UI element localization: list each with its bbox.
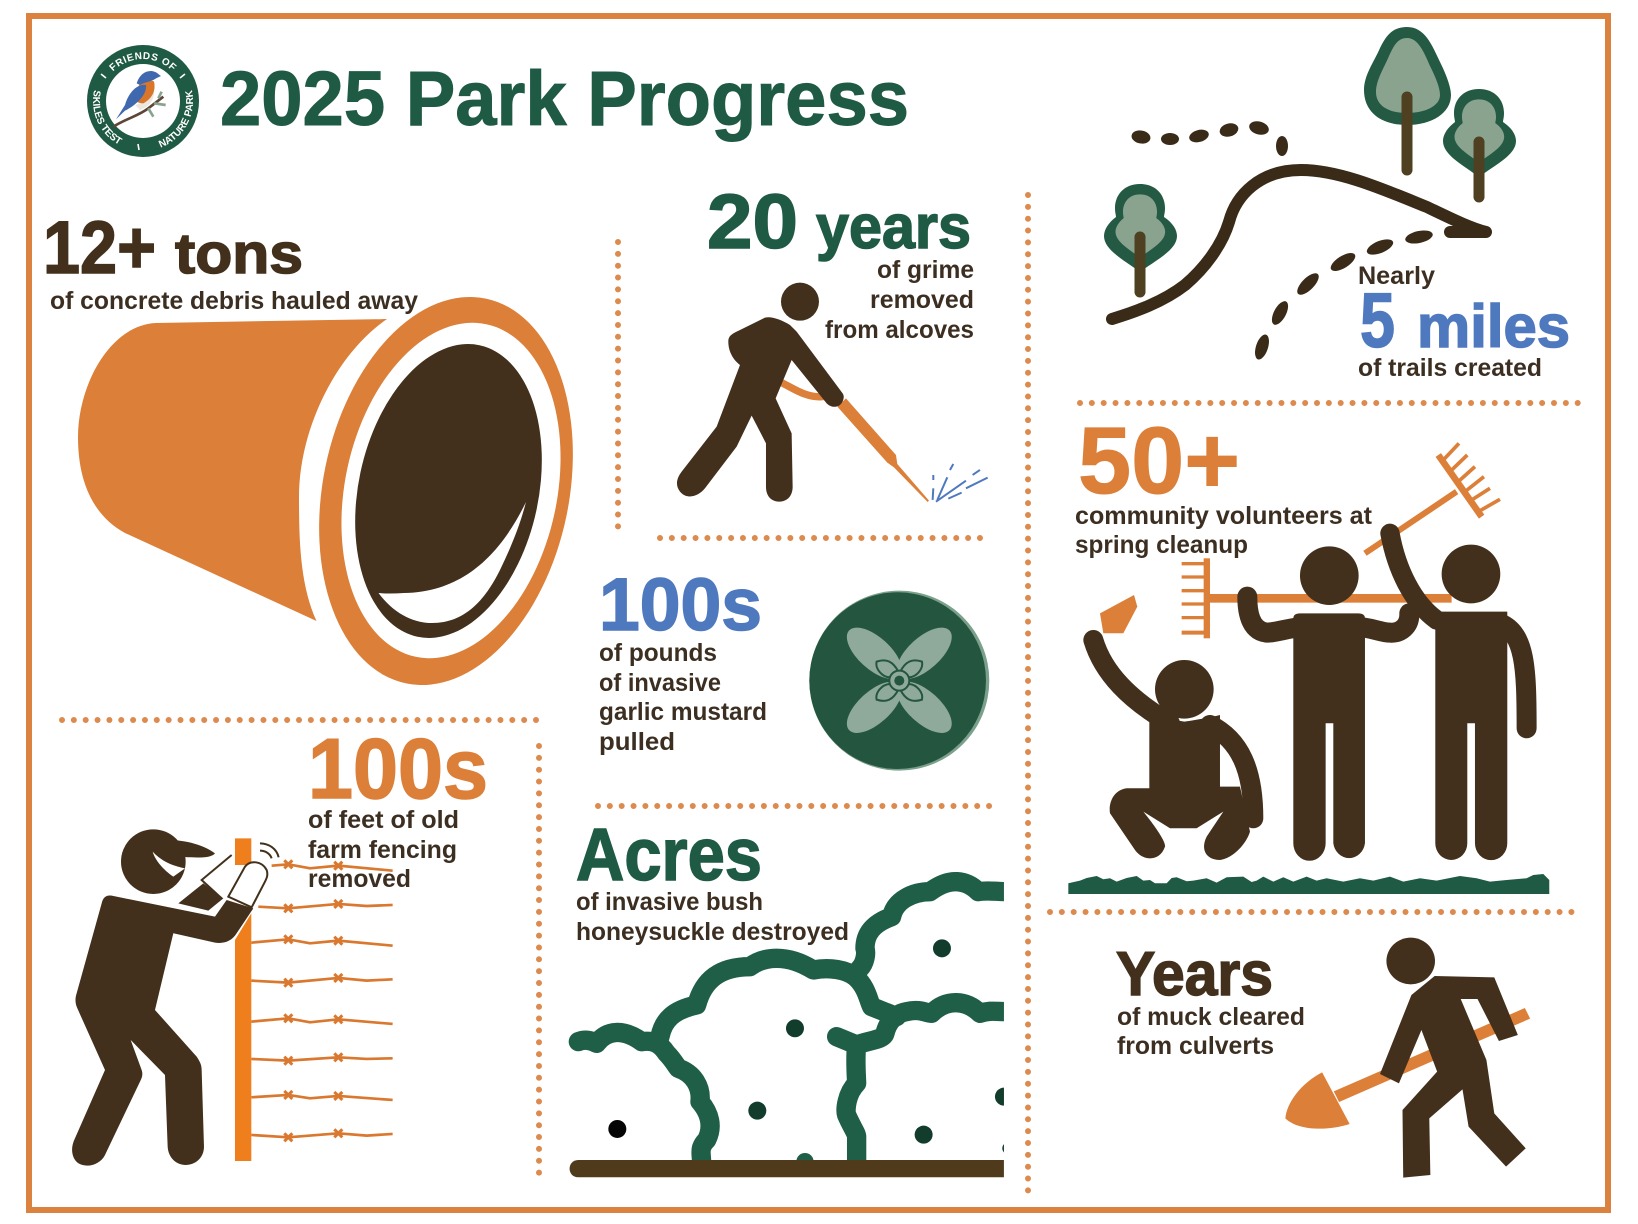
caption: garlic mustard: garlic mustard [599, 698, 767, 726]
title: 2025 Park Progress [220, 56, 909, 142]
stat: 20 years: 20 [707, 179, 798, 265]
caption: volunteers: spring cleanup [1075, 531, 1248, 559]
panel: bush honeysuckle [570, 813, 1014, 1177]
panel: concrete debris [43, 206, 606, 708]
stat: 20 years: years [816, 193, 971, 262]
logo: Friends of Skiles Test Nature Park: FRIENDS OF [108, 52, 177, 71]
icon: person with shovel [1285, 938, 1527, 1178]
caption: garlic mustard [599, 639, 767, 756]
stat: 12+ tons [43, 206, 303, 289]
caption: garlic mustard: of pounds [599, 639, 717, 667]
caption: farm fencing: removed [308, 865, 411, 893]
caption: farm fencing: of feet of old [308, 806, 459, 834]
panel: farm fencing [72, 722, 488, 1166]
caption: grime: removed [870, 286, 974, 314]
icon: tree large [1364, 27, 1451, 170]
panel: grime removed [677, 179, 988, 502]
stat: 100s pounds: 100s [599, 563, 762, 646]
stat: 50+: 50+ [1078, 408, 1240, 514]
stat: 20 years [707, 179, 971, 265]
caption: muck [1117, 1003, 1305, 1060]
icon: fence post and barbed wire [235, 838, 393, 1161]
icon: person cutting fence [72, 829, 279, 1166]
icon: tree right [1443, 89, 1516, 197]
caption: volunteers: community volunteers at [1075, 502, 1373, 530]
stat: Years: Years [1116, 940, 1273, 1009]
logo: Friends of Skiles Test Nature Park: NATURE PARK [158, 90, 193, 148]
caption: trails created: of trails created [1358, 354, 1542, 382]
caption: garlic mustard: pulled [599, 728, 675, 756]
caption: grime [825, 256, 974, 344]
panel: volunteers [1068, 408, 1549, 894]
caption: volunteers [1075, 502, 1373, 559]
caption: muck: of muck cleared [1117, 1003, 1305, 1031]
caption: grime: of grime [877, 256, 974, 284]
stat: 100s feet: 100s [308, 722, 488, 817]
icon: garlic mustard flower [809, 591, 989, 771]
stat: 12+ tons: tons [175, 222, 303, 286]
icon: tree left [1104, 184, 1177, 292]
panel: trails [1104, 27, 1570, 382]
icon: honeysuckle bushes [570, 882, 1014, 1177]
icon: pressure washer worker [677, 283, 988, 502]
caption: garlic mustard: of invasive [599, 669, 721, 697]
icon: grass [1068, 874, 1549, 894]
caption: farm fencing [308, 806, 459, 893]
stat: 12+ tons: 12+ [43, 206, 156, 289]
logo: Friends of Skiles Test Nature Park: SKILES TEST [93, 90, 123, 144]
caption: grime: from alcoves [825, 316, 974, 344]
caption: honeysuckle [576, 888, 849, 946]
caption: honeysuckle: of invasive bush [576, 888, 763, 916]
icon: culvert pipe [78, 274, 606, 708]
caption: concrete debris: of concrete debris hauled away [50, 287, 418, 315]
caption: nearly: Nearly [1358, 262, 1435, 290]
stat: 5 miles: miles [1417, 293, 1570, 360]
icon: volunteers with rakes [1068, 443, 1549, 894]
caption: honeysuckle: honeysuckle destroyed [576, 918, 849, 946]
stat: Acres: Acres [576, 813, 762, 896]
caption: muck: from culverts [1117, 1032, 1274, 1060]
icon: trail path [1112, 119, 1486, 361]
logo: Friends of Skiles Test Nature Park [87, 45, 199, 157]
stat: 5 miles [1360, 278, 1570, 364]
caption: farm fencing: farm fencing [308, 836, 457, 864]
panel: culverts [1116, 938, 1527, 1178]
stat: 5 miles: 5 [1360, 278, 1395, 364]
panel: garlic mustard [599, 563, 989, 771]
